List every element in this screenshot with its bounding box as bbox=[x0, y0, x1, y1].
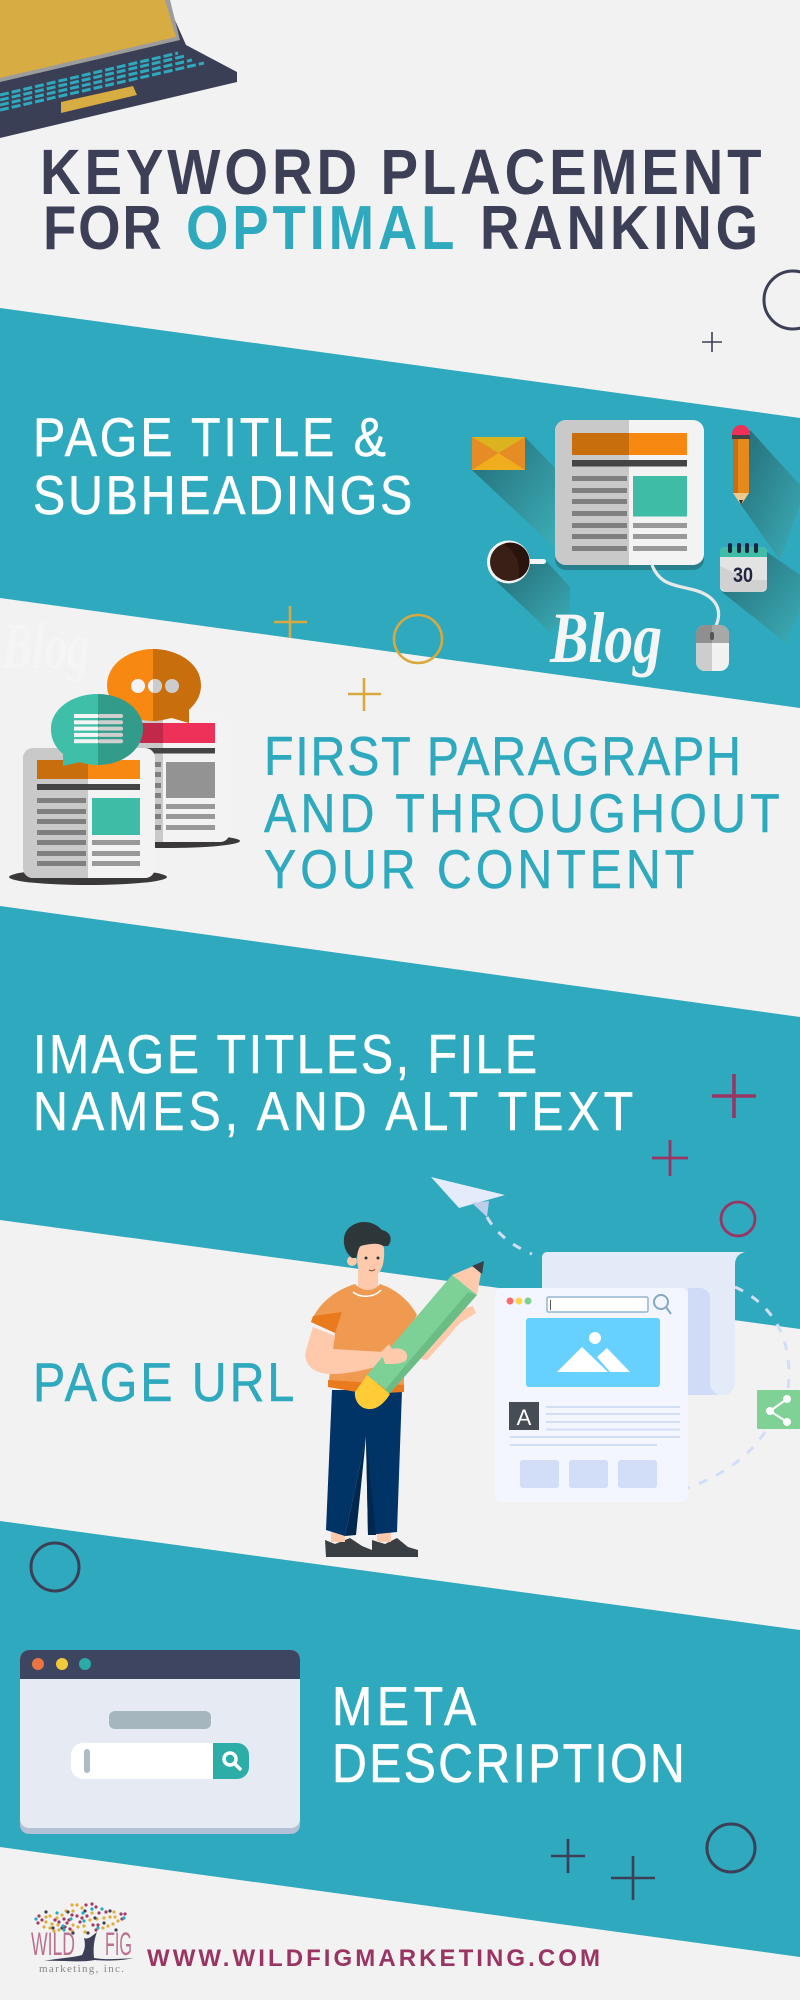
heading: image titles bbox=[33, 1023, 633, 1142]
t-shirt bbox=[311, 1284, 417, 1394]
icon: envelope bbox=[472, 437, 555, 548]
band: section 3 background bbox=[0, 906, 800, 1329]
dashed flight paths bbox=[487, 1217, 789, 1488]
icon: orange speech bubble bbox=[107, 649, 201, 723]
window title bar bbox=[20, 1650, 300, 1679]
placeholder heading bbox=[109, 1711, 211, 1729]
illustration: articles with speech bubbles bbox=[9, 649, 240, 885]
illustration: browser search window bbox=[20, 1650, 300, 1834]
band: section 5 background bbox=[0, 1521, 800, 1957]
face bbox=[347, 1242, 384, 1278]
icon: mouse and cable bbox=[652, 565, 729, 671]
buttons bbox=[520, 1460, 657, 1488]
icon: tablet bbox=[555, 420, 704, 570]
arm bbox=[305, 1327, 407, 1374]
icon: share bbox=[757, 1390, 800, 1429]
text lines bbox=[510, 1406, 680, 1446]
title: KEYWORD PLACEMENT bbox=[40, 136, 762, 208]
heading: page url: PAGE URL bbox=[33, 1351, 294, 1413]
heading: meta description bbox=[332, 1675, 685, 1794]
window dots bbox=[506, 1298, 532, 1304]
wordmark WILD FIG: WILD bbox=[31, 1926, 75, 1962]
search box bbox=[547, 1297, 648, 1312]
image placeholder bbox=[526, 1318, 660, 1387]
heading: first paragraph: FIRST PARAGRAPH bbox=[264, 725, 741, 787]
icon: calendar: 30 bbox=[733, 564, 753, 587]
title bbox=[40, 136, 762, 263]
heading: meta description: DESCRIPTION bbox=[332, 1732, 685, 1794]
pencil bbox=[355, 1261, 484, 1409]
text: faint Blog watermark: Blog bbox=[1, 610, 90, 683]
document back sheet bbox=[542, 1252, 745, 1395]
decoration: crimson plus signs and circle bbox=[652, 1074, 756, 1236]
ankles bbox=[331, 1530, 391, 1542]
shadow: back tablet bbox=[90, 834, 240, 848]
document roll bbox=[688, 1288, 720, 1395]
tree trunk bbox=[44, 1932, 134, 1961]
heading: page title and subheadings: PAGE TITLE & bbox=[33, 406, 386, 468]
icon: green speech bubble bbox=[51, 694, 143, 766]
icon: magnifier bbox=[654, 1295, 671, 1314]
icon: coffee cup bbox=[487, 540, 570, 632]
wordmark marketing inc: marketing, inc. bbox=[39, 1963, 124, 1975]
icon: laptop bbox=[0, 0, 237, 138]
shadow: front tablet bbox=[9, 869, 167, 885]
near hand bbox=[381, 1344, 407, 1364]
tree canopy dots bbox=[36, 1904, 125, 1933]
logo: Wild Fig Marketing bbox=[31, 1904, 134, 1975]
decoration: navy circle left bbox=[31, 1543, 79, 1591]
heading: meta description: META bbox=[332, 1675, 477, 1737]
text: Blog script: Blog bbox=[549, 598, 662, 678]
heading: page title and subheadings bbox=[33, 406, 412, 526]
decoration: navy circle and plus top right bbox=[702, 271, 800, 352]
heading: image titles: IMAGE TITLES, FILE bbox=[33, 1023, 537, 1085]
search field bbox=[71, 1743, 249, 1779]
shoes bbox=[325, 1538, 418, 1557]
heading: first paragraph bbox=[264, 725, 780, 900]
hair bbox=[344, 1222, 391, 1258]
illustration: web page document bbox=[431, 1177, 800, 1502]
window buttons bbox=[32, 1658, 91, 1670]
band: section 1 background bbox=[0, 308, 800, 708]
illustration: man holding pencil bbox=[305, 1222, 484, 1557]
document front page bbox=[495, 1288, 688, 1502]
icon: front article bbox=[23, 748, 155, 878]
icon: back article bbox=[100, 712, 230, 842]
heading: image titles: NAMES, AND ALT TEXT bbox=[33, 1080, 633, 1142]
heading: first paragraph: AND THROUGHOUT bbox=[264, 782, 780, 844]
icon: paper plane bbox=[431, 1177, 505, 1217]
icon: pencil bbox=[732, 425, 800, 560]
far hand bbox=[417, 1306, 476, 1360]
letter badge: A bbox=[517, 1405, 532, 1430]
decoration: navy plus signs and circle bottom bbox=[551, 1824, 755, 1900]
wordmark WILD FIG: FIG bbox=[105, 1926, 132, 1962]
illustration: blog tablet with desk items bbox=[472, 420, 800, 678]
decoration: gold circle and plus signs bbox=[274, 606, 442, 711]
heading: page title and subheadings: SUBHEADINGS bbox=[33, 464, 412, 526]
title: RANKING bbox=[480, 194, 758, 263]
title: OPTIMAL bbox=[186, 194, 454, 263]
icon: calendar bbox=[720, 543, 800, 643]
neck bbox=[358, 1270, 378, 1290]
title: FOR bbox=[43, 194, 162, 263]
letter badge bbox=[509, 1402, 539, 1430]
heading: first paragraph: YOUR CONTENT bbox=[264, 838, 694, 900]
footer url: WWW.WILDFIGMARKETING.COM bbox=[147, 1945, 600, 1972]
trousers bbox=[326, 1390, 402, 1536]
